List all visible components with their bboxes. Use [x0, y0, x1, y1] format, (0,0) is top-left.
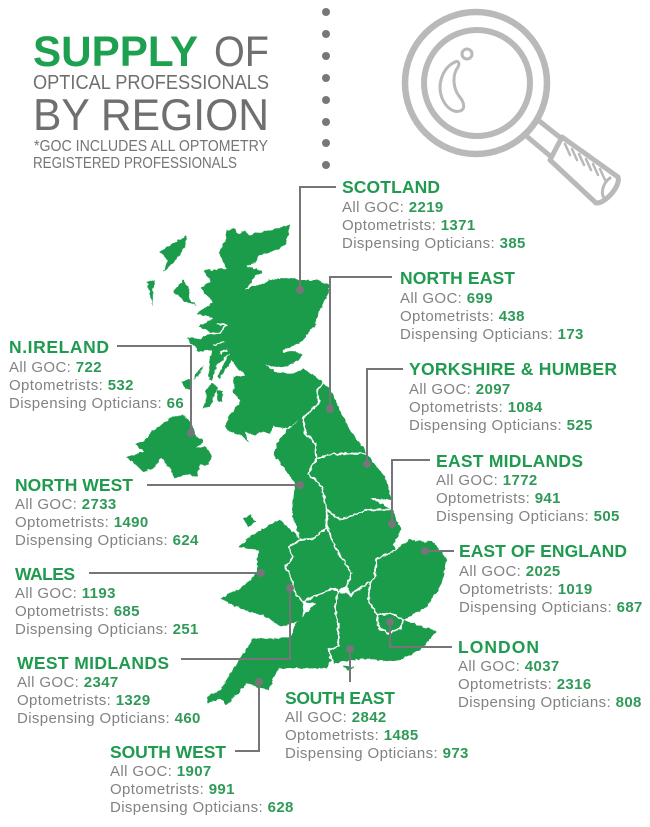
label: Yorkshire and Humber: [409, 359, 617, 434]
label: Yorkshire and Humber: Optometrists: 1084: [409, 399, 543, 416]
title: OPTICAL PROFESSIONALS: [33, 72, 269, 94]
region: England and Wales: [207, 383, 447, 705]
label: London: Dispensing Opticians: 808: [458, 694, 642, 711]
region: Northern Ireland: [127, 415, 212, 478]
label: North East: [400, 268, 584, 343]
label: West Midlands: Dispensing Opticians: 460: [17, 710, 201, 727]
label: Wales: [15, 564, 199, 638]
label: North East: NORTH EAST: [400, 268, 515, 288]
label: South West: SOUTH WEST: [110, 742, 226, 762]
label: South West: [110, 742, 294, 816]
label: East of England: Dispensing Opticians: 687: [459, 599, 643, 616]
title: [33, 28, 269, 140]
leader: East of England: [421, 547, 454, 555]
title: OF: [214, 28, 269, 76]
leader: Scotland: [296, 187, 336, 294]
leader: East Midlands: [388, 460, 430, 528]
footnote: *GOC INCLUDES ALL OPTOMETRY: [34, 138, 268, 155]
footnote: REGISTERED PROFESSIONALS: [33, 155, 237, 172]
label: South West: All GOC: 1907: [110, 763, 212, 780]
leader: London: [386, 618, 452, 647]
label: South East: Dispensing Opticians: 973: [285, 745, 469, 762]
leader: Yorkshire and Humber: [363, 369, 403, 468]
label: London: All GOC: 4037: [458, 658, 560, 675]
region: South East: [328, 582, 437, 663]
region: North East: [303, 383, 367, 458]
label: Yorkshire and Humber: Dispensing Opticians: 525: [409, 417, 593, 434]
leader: Northern Ireland: [117, 346, 195, 437]
label: Wales: Optometrists: 685: [15, 603, 140, 620]
label: North East: Optometrists: 438: [400, 308, 525, 325]
leader: North West: [147, 481, 304, 489]
icon: Isle of Wight: [343, 666, 355, 671]
label: Wales: Dispensing Opticians: 251: [15, 621, 199, 638]
label: West Midlands: All GOC: 2347: [17, 674, 119, 691]
footnote: [33, 138, 268, 172]
label: East Midlands: EAST MIDLANDS: [436, 451, 583, 471]
region: East Midlands: [327, 509, 402, 595]
region: Wales: [220, 520, 303, 627]
title: BY REGION: [33, 91, 269, 140]
label: East of England: Optometrists: 1019: [459, 581, 593, 598]
label: Northern Ireland: All GOC: 722: [9, 359, 102, 376]
icon: magnifying glass: [405, 12, 618, 203]
label: London: LONDON: [458, 637, 539, 657]
label: North West: Optometrists: 1490: [15, 514, 149, 531]
label: South East: Optometrists: 1485: [285, 727, 419, 744]
label: West Midlands: Optometrists: 1329: [17, 692, 151, 709]
region: West Midlands: [285, 527, 352, 602]
label: East Midlands: Optometrists: 941: [436, 490, 561, 507]
leader: South East: [346, 645, 354, 682]
title: SUPPLY: [33, 28, 198, 76]
label: East Midlands: All GOC: 1772: [436, 472, 538, 489]
label: West Midlands: [17, 653, 201, 727]
label: Scotland: Dispensing Opticians: 385: [342, 235, 526, 252]
label: East Midlands: [436, 451, 620, 525]
leader: North East: [326, 277, 392, 413]
label: West Midlands: WEST MIDLANDS: [17, 653, 169, 673]
label: East of England: [459, 541, 643, 616]
label: Yorkshire and Humber: All GOC: 2097: [409, 381, 511, 398]
label: North West: Dispensing Opticians: 624: [15, 532, 199, 549]
label: East of England: EAST OF ENGLAND: [459, 541, 627, 561]
label: South West: Dispensing Opticians: 628: [110, 799, 294, 816]
label: North East: Dispensing Opticians: 173: [400, 326, 584, 343]
region: East of England: [368, 540, 447, 620]
label: London: Optometrists: 2316: [458, 676, 592, 693]
region: Yorkshire and Humber: [308, 453, 392, 520]
dotted divider: [322, 8, 330, 169]
region: South West: [207, 588, 338, 705]
leader: Wales: [89, 569, 265, 577]
label: North West: NORTH WEST: [15, 475, 133, 495]
label: London: [458, 637, 642, 711]
region: London: [377, 613, 403, 633]
region borders: [285, 383, 403, 663]
label: Scotland: SCOTLAND: [342, 177, 440, 197]
label: Northern Ireland: [9, 337, 184, 412]
label: South East: SOUTH EAST: [285, 688, 395, 708]
label: Northern Ireland: Dispensing Opticians: 66: [9, 395, 184, 412]
label: North West: All GOC: 2733: [15, 496, 117, 513]
label: Scotland: [342, 177, 526, 252]
icon: Anglesey: [243, 515, 255, 527]
map of the UK: [127, 225, 447, 705]
label: Northern Ireland: Optometrists: 532: [9, 377, 134, 394]
label: Wales: All GOC: 1193: [15, 585, 116, 602]
leader: South West: [235, 678, 263, 751]
label: East of England: All GOC: 2025: [459, 563, 561, 580]
label: South East: All GOC: 2842: [285, 709, 387, 726]
label: Wales: WALES: [15, 564, 75, 584]
region: North West: [273, 418, 327, 538]
label: Northern Ireland: N.IRELAND: [9, 337, 109, 357]
label: South East: [285, 688, 469, 762]
label: Scotland: All GOC: 2219: [342, 199, 444, 216]
label: North East: All GOC: 699: [400, 290, 493, 307]
label: South West: Optometrists: 991: [110, 781, 235, 798]
label: East Midlands: Dispensing Opticians: 505: [436, 508, 620, 525]
label: Yorkshire and Humber: YORKSHIRE & HUMBER: [409, 359, 617, 379]
region: Scotland: [147, 225, 330, 442]
label: North West: [15, 475, 199, 549]
label: Scotland: Optometrists: 1371: [342, 217, 476, 234]
leader: West Midlands: [181, 584, 294, 659]
